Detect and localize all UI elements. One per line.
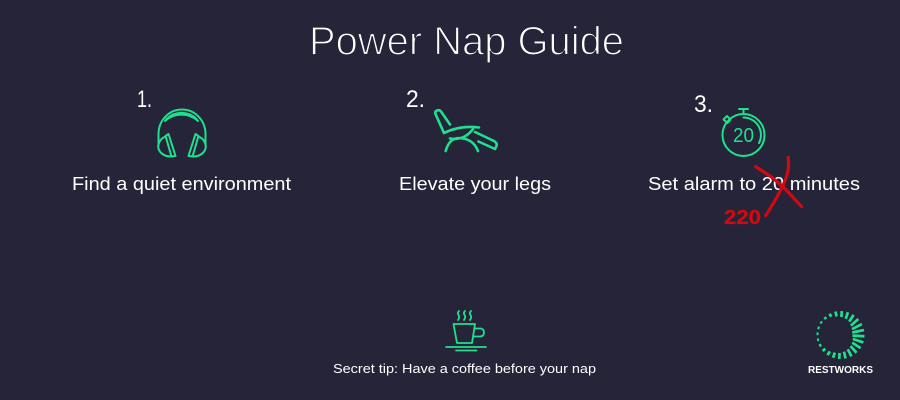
step 1 label: Find a quiet environment [72, 174, 291, 194]
logo: Restworks [808, 311, 873, 376]
icon: stopwatch 20 [722, 109, 764, 156]
step 1 number: 1. [137, 86, 152, 113]
tip text: Secret tip: Have a coffee before your nap [333, 361, 596, 376]
title: Power Nap Guide [309, 20, 624, 64]
icon: coffee cup [446, 311, 486, 350]
step 2 number: 2. [406, 86, 425, 113]
logo ring [817, 311, 864, 359]
step 3 number: 3. [694, 91, 713, 118]
secret tip [333, 311, 596, 376]
red handwritten cross-out [756, 157, 802, 216]
icon: reclining chair [435, 110, 497, 151]
icon: stopwatch 20: 20 [733, 125, 754, 147]
step 3 label: Set alarm to 20 minutes [648, 174, 860, 194]
icon: headphones [158, 109, 206, 157]
step 3 [648, 91, 860, 229]
step 2 [399, 86, 551, 194]
step 1 [72, 86, 291, 194]
logo wordmark: RESTWORKS [808, 364, 873, 376]
red correction 220: 220 [724, 207, 761, 229]
step 2 label: Elevate your legs [399, 174, 551, 194]
